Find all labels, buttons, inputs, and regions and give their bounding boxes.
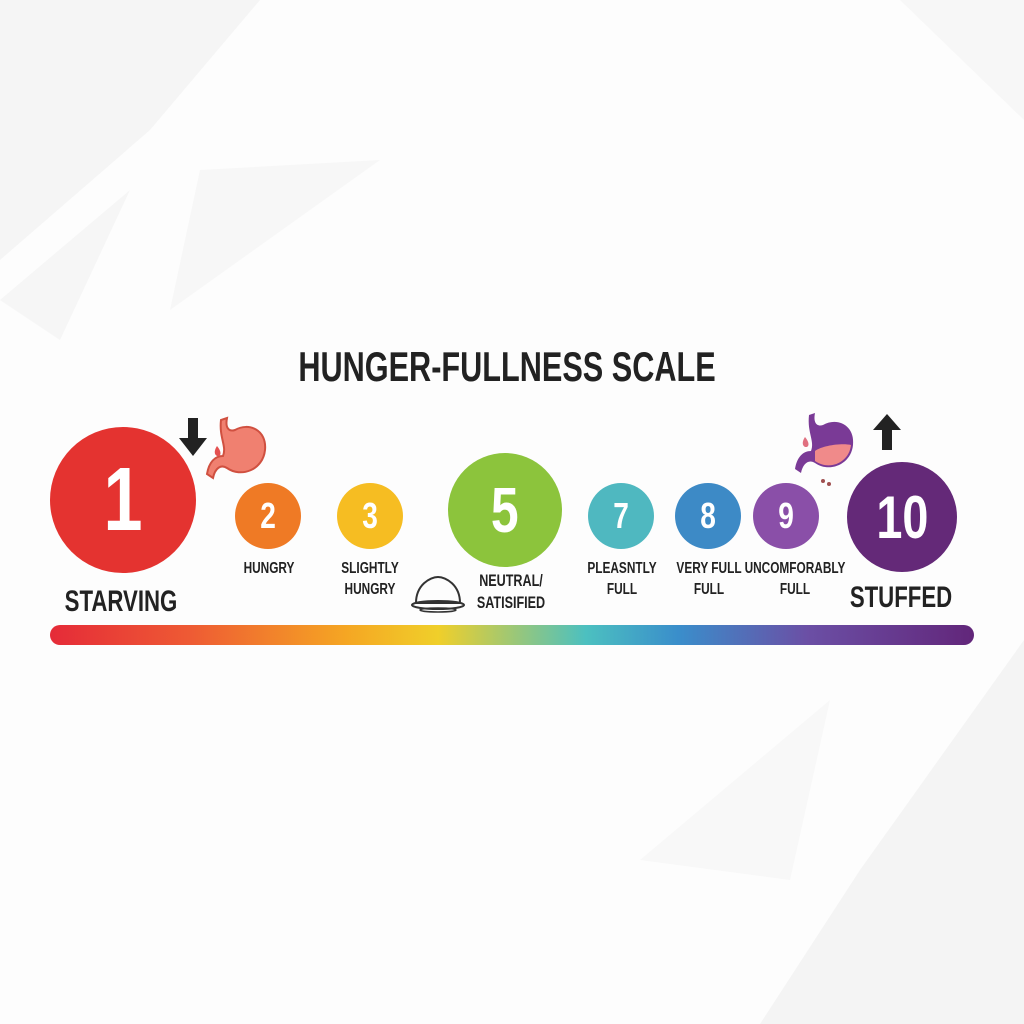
circle 1: 1 (103, 450, 143, 550)
circle 1 (50, 427, 196, 573)
label pleasntly full: FULL (607, 581, 637, 598)
label starving: STARVING (65, 585, 177, 618)
label pleasntly full: PLEASNTLY (587, 560, 657, 577)
circle 8 (675, 483, 741, 549)
arrow down (179, 418, 207, 456)
circle 2: 2 (260, 495, 276, 536)
circle 2 (235, 483, 301, 549)
circle 8: 8 (700, 495, 716, 536)
circle 9: 9 (778, 495, 794, 536)
circle 5 (448, 453, 562, 567)
label slightly hungry: HUNGRY (345, 581, 395, 598)
circle 3: 3 (362, 495, 378, 536)
gradient bar (50, 625, 974, 645)
icon: stomach hungry (206, 416, 266, 480)
label uncomforably full (745, 560, 846, 598)
title: HUNGER-FULLNESS SCALE (298, 343, 716, 390)
label neutral (477, 571, 545, 612)
circle 10 (847, 462, 957, 572)
label very full (676, 560, 742, 598)
circle 3 (337, 483, 403, 549)
label stuffed: STUFFED (850, 581, 952, 614)
circle 5: 5 (491, 474, 519, 546)
label uncomforably full: FULL (780, 581, 810, 598)
circle 9 (753, 483, 819, 549)
icon: plate (411, 576, 465, 613)
arrow up (873, 414, 901, 450)
circle 10: 10 (876, 484, 928, 550)
label uncomforably full: UNCOMFORABLY (745, 560, 845, 577)
label neutral: SATISIFIED (477, 593, 545, 612)
circle 7: 7 (613, 495, 629, 536)
label pleasntly full (587, 560, 657, 598)
label very full: VERY FULL (676, 560, 742, 577)
icon: stomach full (795, 413, 854, 486)
label neutral: NEUTRAL/ (479, 571, 543, 590)
label very full: FULL (694, 581, 724, 598)
label slightly hungry: SLIGHTLY (341, 560, 399, 577)
label hungry: HUNGRY (244, 560, 294, 577)
label slightly hungry (341, 560, 399, 598)
circle 7 (588, 483, 654, 549)
